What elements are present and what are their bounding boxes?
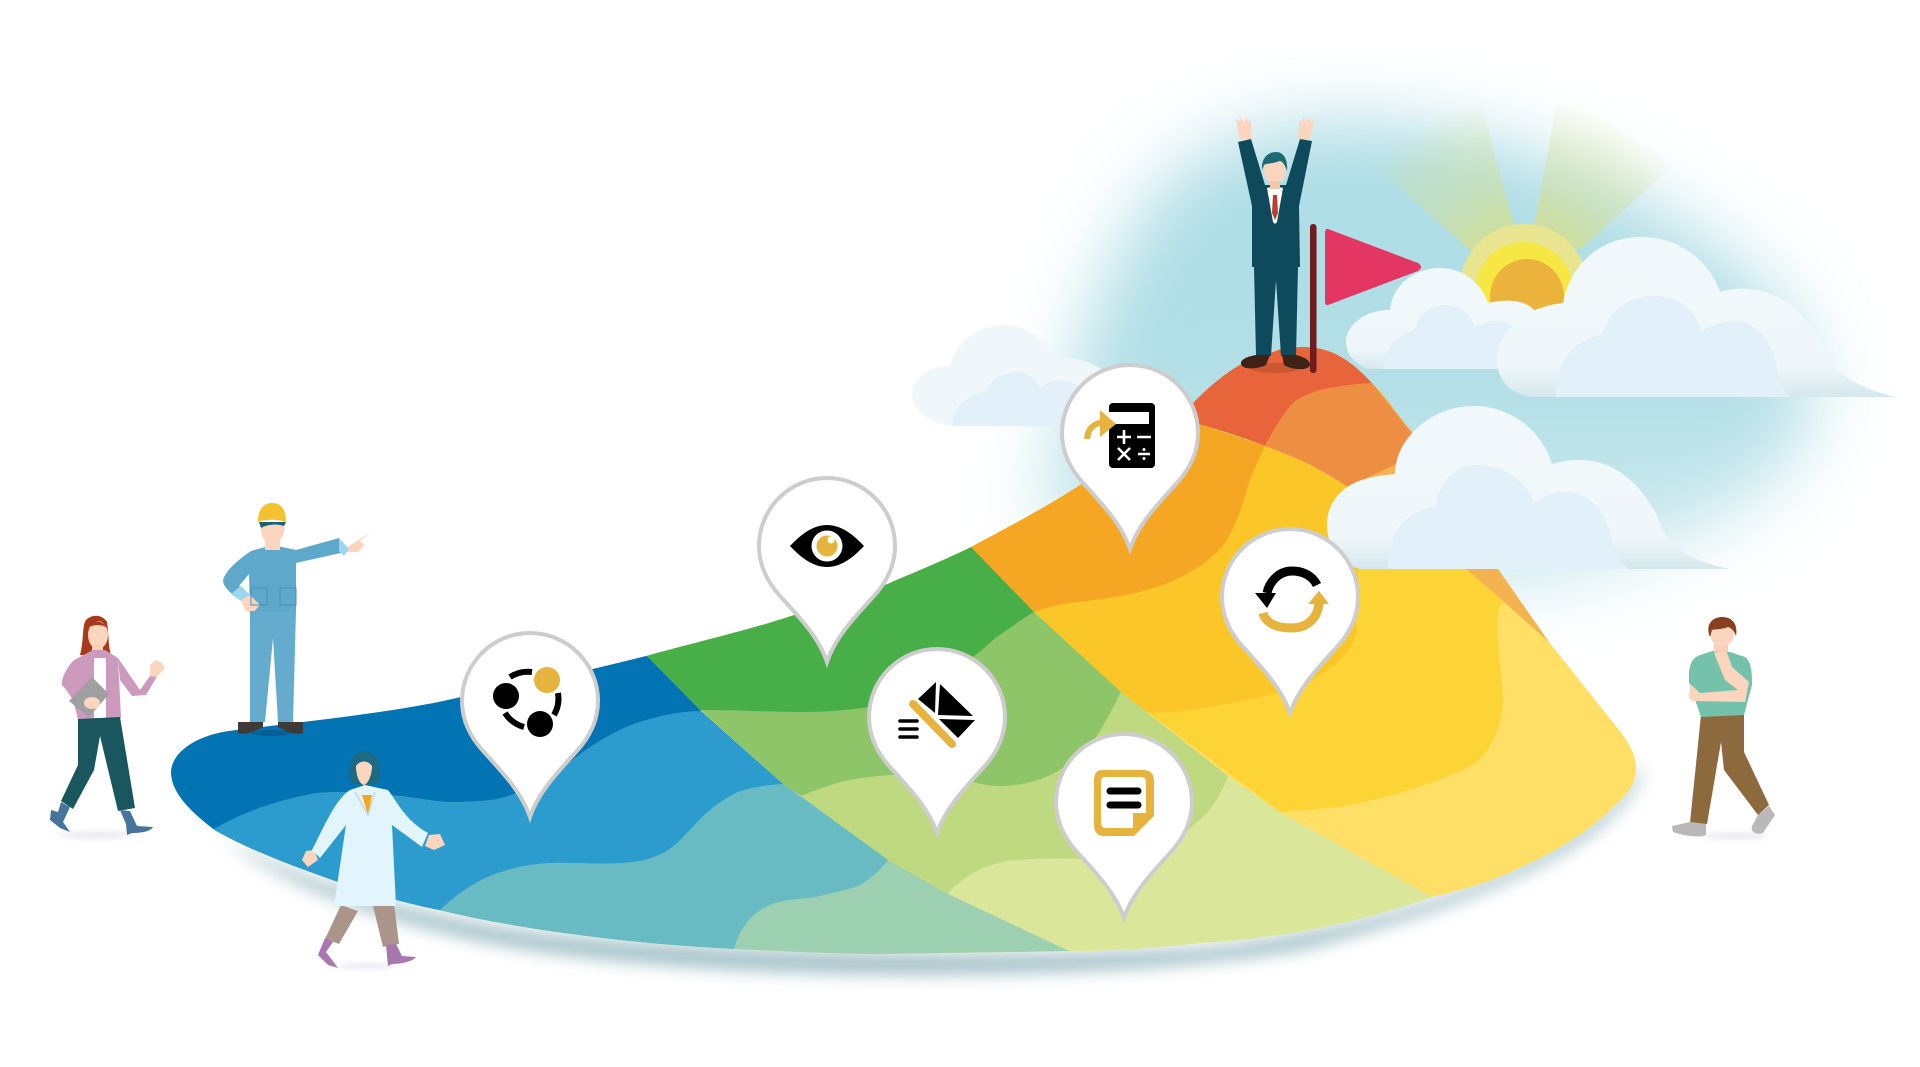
band: column 3 lightest yellow base <box>171 347 1636 954</box>
band: red-orange peak <box>1193 347 1372 446</box>
band: orange <box>971 424 1265 612</box>
pin: envelope <box>869 649 1005 833</box>
pin: calculator <box>1062 365 1198 549</box>
pin: eye <box>759 478 895 662</box>
person: doctor <box>302 751 445 968</box>
band: deep yellow <box>1034 446 1360 713</box>
pin: note <box>1056 734 1192 918</box>
person: thinking man <box>1672 617 1775 839</box>
person: construction worker <box>223 503 371 736</box>
band: orange peak highlight <box>1265 383 1425 487</box>
band: pale green <box>620 612 1432 954</box>
band: teal <box>439 783 888 949</box>
band: pale teal <box>600 796 1069 954</box>
cloud: upper large <box>1497 237 1895 397</box>
sky glow <box>1040 121 1813 593</box>
band: orange right strip <box>1265 383 1549 642</box>
cloud: small left <box>912 325 1108 426</box>
band: green <box>640 547 1034 712</box>
band: mid green <box>690 612 1121 796</box>
mountain <box>171 347 1636 954</box>
sun rays <box>1372 92 1675 251</box>
band: light green <box>700 612 1228 894</box>
band: deep blue <box>171 656 701 830</box>
person: man with raised arms <box>1236 117 1314 373</box>
sun <box>1460 224 1588 352</box>
cloud: upper small <box>1346 268 1560 369</box>
band: bright yellow <box>1148 568 1504 812</box>
cloud: lower <box>1327 406 1730 569</box>
pin: cycle <box>1222 529 1358 713</box>
mountain shadow <box>225 760 1640 975</box>
person: woman with tablet <box>50 616 165 838</box>
flag <box>1310 224 1421 373</box>
band: mid blue <box>190 710 783 911</box>
pin: network <box>462 633 598 817</box>
